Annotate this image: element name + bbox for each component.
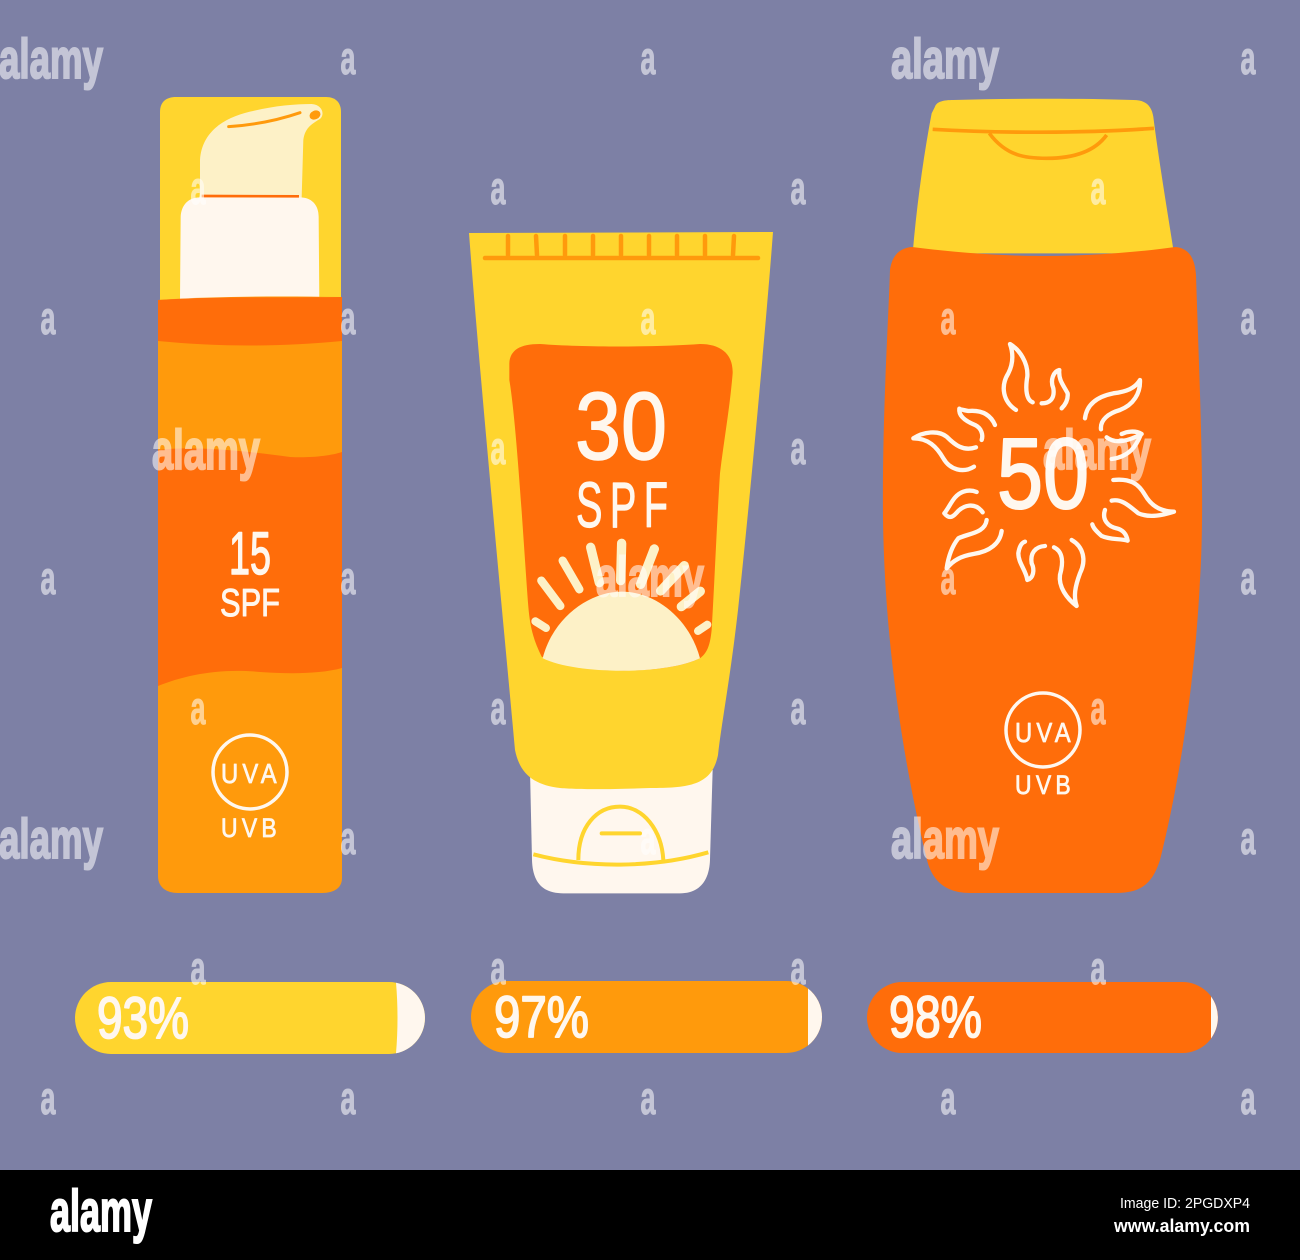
- watermark overlay: a: [340, 292, 356, 344]
- watermark overlay: alamy: [891, 807, 999, 870]
- tube label panel with sun: [509, 344, 733, 671]
- progress bar: 97%: [471, 981, 822, 1053]
- watermark overlay: a: [1090, 942, 1106, 994]
- watermark overlay: alamy: [1043, 418, 1151, 481]
- watermark overlay: a: [340, 812, 356, 864]
- flip cap: [913, 99, 1174, 253]
- SPF 15 label: SPF: [220, 582, 280, 625]
- UVA UVB badge: UVA: [1015, 716, 1075, 748]
- watermark overlay: a: [640, 1072, 656, 1124]
- watermark overlay: a: [40, 552, 56, 604]
- central red band: [158, 448, 342, 686]
- footer bar: [0, 1170, 1300, 1260]
- watermark overlay: a: [790, 942, 806, 994]
- watermark overlay: a: [1240, 1072, 1256, 1124]
- watermark overlay: a: [40, 1072, 56, 1124]
- bottle: SPF 15 pump dispenser: [158, 97, 342, 893]
- tube cap: [530, 770, 713, 893]
- pump top yellow panel: [160, 97, 341, 300]
- progress bar: 97%: 97%: [494, 985, 589, 1050]
- watermark overlay: a: [790, 422, 806, 474]
- watermark overlay: a: [1240, 292, 1256, 344]
- SPF 30 label: 30: [575, 373, 667, 480]
- watermark overlay: a: [340, 552, 356, 604]
- watermark overlay: a: [640, 292, 656, 344]
- watermark overlay: a: [190, 682, 206, 734]
- watermark overlay: a: [790, 682, 806, 734]
- watermark overlay: a: [940, 552, 956, 604]
- UVA UVB badge: [213, 735, 287, 843]
- watermark overlay: a: [490, 162, 506, 214]
- bottle: SPF 50 flip-cap bottle: [883, 99, 1202, 893]
- watermark overlay: a: [40, 292, 56, 344]
- bottle: SPF 30 tube: [469, 232, 773, 893]
- SPF 30 label: SPF: [576, 471, 675, 541]
- UVA UVB badge: UVA: [221, 757, 281, 789]
- progress bar: 98%: [867, 982, 1218, 1053]
- tube body: [469, 232, 773, 789]
- pump head: [180, 104, 323, 300]
- watermark overlay: a: [940, 1072, 956, 1124]
- watermark overlay: a: [190, 942, 206, 994]
- watermark overlay: a: [340, 32, 356, 84]
- website: www.alamy.com: [1113, 1216, 1250, 1236]
- watermark overlay: a: [1240, 32, 1256, 84]
- UVA UVB badge: UVB: [221, 813, 281, 843]
- watermark overlay: alamy: [891, 27, 999, 90]
- watermark overlay: a: [1090, 682, 1106, 734]
- watermark overlay: a: [490, 682, 506, 734]
- progress bar: 93%: [75, 982, 425, 1054]
- watermark overlay: a: [340, 1072, 356, 1124]
- upper red band: [158, 297, 342, 346]
- sun outline rays: [913, 344, 1174, 606]
- SPF 30 label: [575, 373, 675, 541]
- watermark overlay: a: [1240, 552, 1256, 604]
- footer logo: alamy: [50, 1179, 152, 1244]
- watermark overlay: a: [1240, 812, 1256, 864]
- progress bar: 93%: 93%: [97, 986, 189, 1051]
- watermark overlay: alamy: [0, 27, 103, 90]
- tube crimp lines: [485, 236, 758, 258]
- SPF 15 label: [220, 520, 280, 625]
- UVA UVB badge: UVB: [1015, 770, 1075, 800]
- watermark overlay: a: [940, 292, 956, 344]
- watermark overlay: a: [1090, 162, 1106, 214]
- bottle body: [883, 247, 1202, 893]
- SPF 15 label: 15: [229, 520, 271, 587]
- bottle body: [158, 296, 342, 893]
- watermark overlay: a: [490, 422, 506, 474]
- watermark overlay: a: [190, 162, 206, 214]
- SPF 50 number: 50: [997, 418, 1089, 530]
- watermark overlay: a: [640, 812, 656, 864]
- UVA UVB badge: [1006, 693, 1080, 800]
- image id: Image ID: 2PGDXP4: [1120, 1195, 1250, 1212]
- progress bar: 98%: 98%: [889, 985, 982, 1050]
- watermark overlay: alamy: [596, 545, 704, 608]
- watermark overlay: alamy: [0, 807, 103, 870]
- watermark overlay: a: [640, 32, 656, 84]
- watermark overlay: a: [490, 942, 506, 994]
- watermark overlay: a: [790, 162, 806, 214]
- watermark overlay: alamy: [152, 418, 260, 481]
